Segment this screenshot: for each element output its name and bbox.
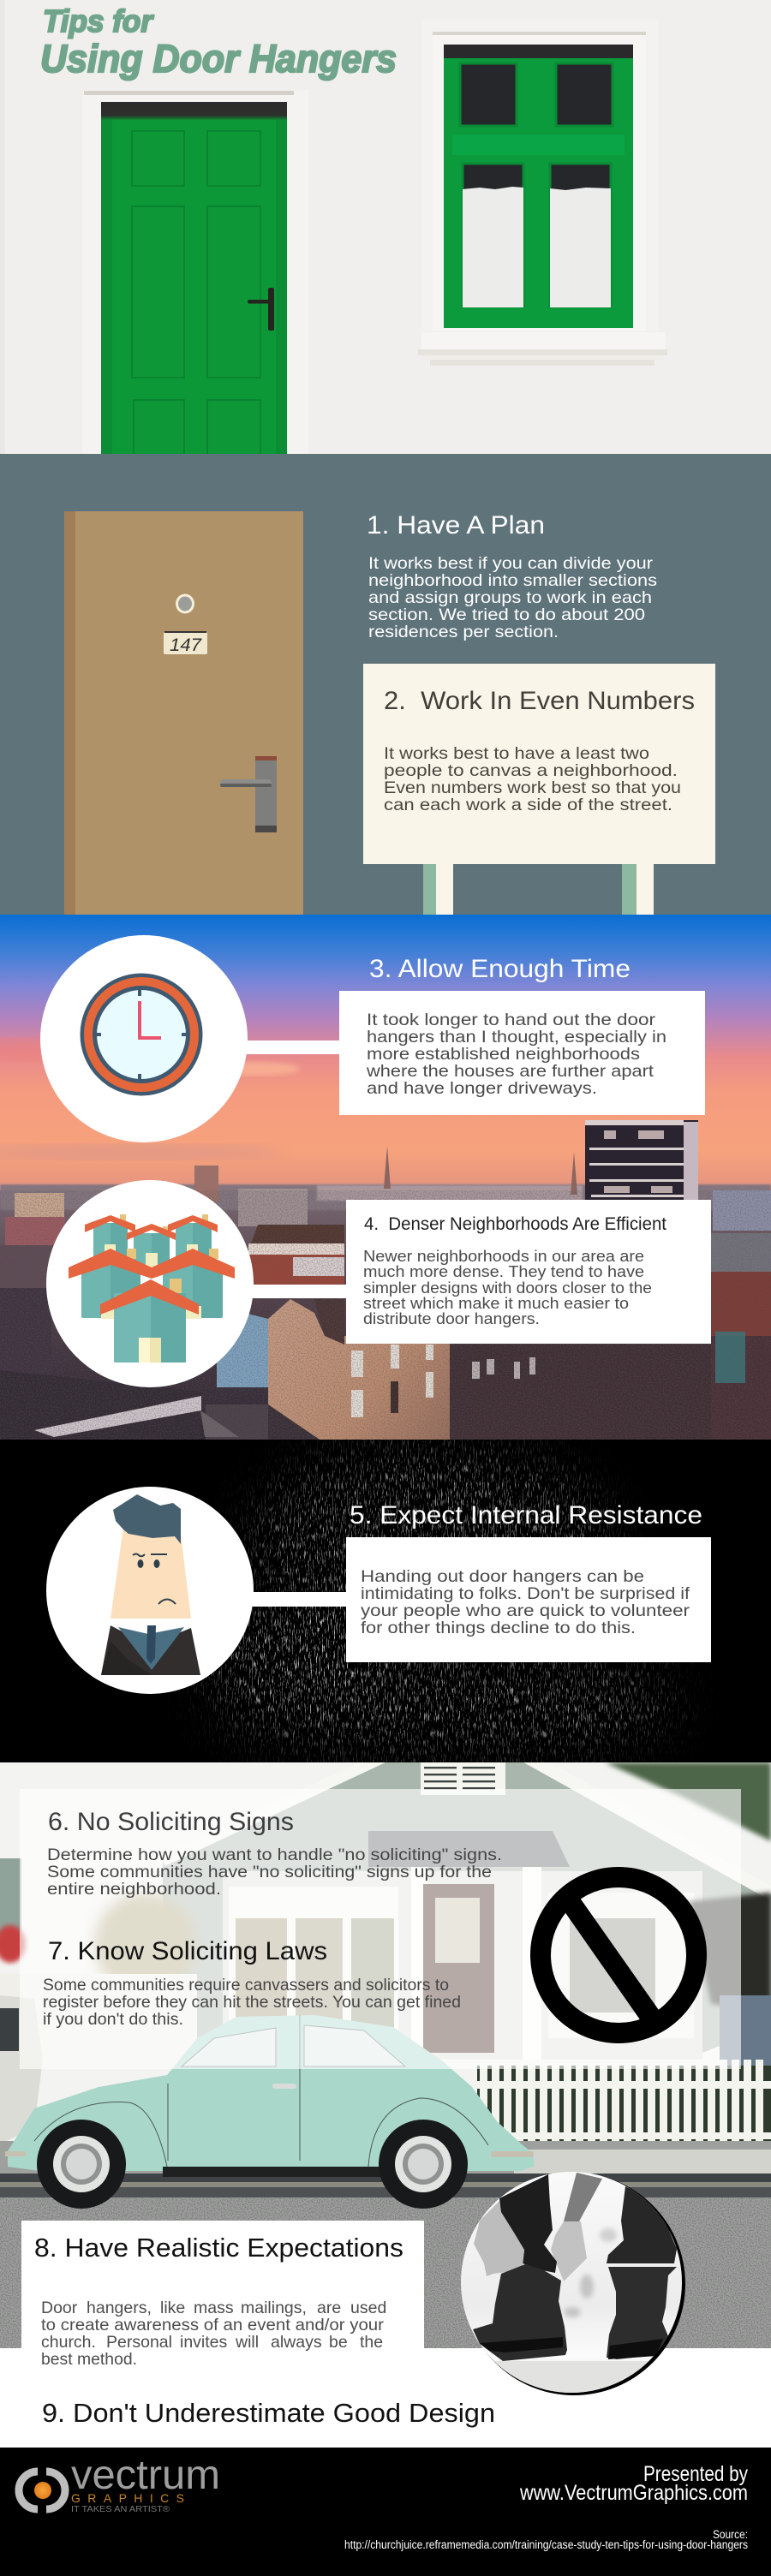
- panel: tip 5 on black grunge: [0, 1440, 771, 1762]
- tip 8 body: be: [329, 2333, 348, 2352]
- panel: tips 3 and 4 over city at sunset: [0, 915, 771, 1440]
- clock circle and connector: [40, 935, 343, 1142]
- illustration: door 147: 147: [170, 635, 202, 655]
- tip 9 heading: 9. Don't Underestimate Good Design: [42, 2398, 495, 2428]
- tip 1 body: It works best if you can divide your: [368, 554, 654, 573]
- presented by: Presented by: [643, 2462, 748, 2486]
- tip 8 body: used: [350, 2299, 386, 2317]
- tip 8 body: [41, 2299, 386, 2369]
- tip 8 heading: 8. Have Realistic Expectations: [34, 2233, 403, 2263]
- tip 4 body: much more dense. They tend to have: [363, 1263, 644, 1280]
- tip 7 text: if you don't do this.: [43, 2010, 183, 2029]
- icon: clock: [81, 973, 202, 1096]
- image: boots in circle: [454, 2172, 694, 2400]
- tip 8 body: to create awareness of an event and/or your: [41, 2316, 385, 2334]
- title: Using Door Hangers: [40, 37, 397, 80]
- tip 5 box: your people who are quick to volunteer: [361, 1601, 690, 1620]
- tip 8 body: Personal: [106, 2333, 172, 2352]
- icon: worried man: [101, 1494, 200, 1675]
- tip 3 box: hangers than I thought, especially in: [367, 1028, 666, 1046]
- logo: GRAPHICS: [71, 2491, 184, 2505]
- tip 4 body: Newer neighborhoods in our area are: [363, 1248, 644, 1265]
- wheels: [37, 2120, 468, 2209]
- panel: tips 8 and 9: [21, 2172, 685, 2427]
- door panels: [132, 131, 260, 455]
- tip 5 box: [346, 1537, 711, 1662]
- logo: IT TAKES AN ARTIST®: [71, 2504, 170, 2514]
- tip 3 heading: 3. Allow Enough Time: [369, 955, 631, 983]
- tip 8 body: church.: [41, 2333, 96, 2352]
- tip 1 body: and assign groups to work in each: [368, 588, 652, 607]
- illustration: door 147: [64, 511, 303, 915]
- tip 4 body: street which make it much easier to: [363, 1295, 629, 1312]
- tip 5 box: Handing out door hangers can be: [361, 1567, 644, 1586]
- logo: [19, 2453, 220, 2514]
- window upper panes: [460, 63, 613, 126]
- tip 4 box: [346, 1200, 711, 1344]
- door frame: [82, 90, 308, 454]
- window lower panes with curtains: [463, 164, 611, 307]
- panel: tips 1 and 2: [0, 454, 771, 915]
- houses circle and connector: [46, 1180, 349, 1387]
- tip 1 body: neighborhood into smaller sections: [368, 571, 657, 590]
- tip 8 body: like: [160, 2299, 185, 2317]
- tip 8 body: hangers,: [87, 2299, 152, 2317]
- tip 8 body: always: [271, 2333, 322, 2352]
- tip 1 heading: 1. Have A Plan: [367, 511, 545, 540]
- tip 6 text: [47, 1808, 502, 1899]
- tip 7 text: Some communities require canvassers and solicitors to: [43, 1976, 449, 1995]
- tip 8 body: will: [235, 2333, 259, 2352]
- window frame: [421, 20, 659, 331]
- panel: footer: [0, 2448, 771, 2576]
- tip 6 text: entire neighborhood.: [47, 1880, 221, 1899]
- city photo: [0, 1039, 771, 1440]
- tip 8 body: best method.: [41, 2350, 137, 2369]
- tip 8 body: mailings,: [241, 2299, 307, 2317]
- panel: tips 6 and 7 over house with car: [0, 1720, 771, 2348]
- tip 3 box: where the houses are further apart: [366, 1062, 654, 1081]
- tip 6 text: Determine how you want to handle "no soliciting" signs.: [47, 1846, 502, 1864]
- icon: houses: [69, 1214, 235, 1363]
- tip 7 text: [43, 1937, 461, 2029]
- panel: hero wall with door and window: [0, 0, 771, 455]
- man circle and connector: [46, 1487, 349, 1694]
- tip 4 body: simpler designs with doors closer to the: [363, 1279, 652, 1297]
- tip 8 body: invites: [180, 2333, 228, 2352]
- tip 8 body: Door: [41, 2299, 78, 2317]
- street and sidewalk: [0, 2141, 771, 2348]
- source: [344, 2528, 748, 2551]
- tip 1 body: section. We tried to do about 200: [368, 605, 645, 624]
- tip 4 body: [363, 1248, 652, 1327]
- tip 2 body: can each work a side of the street.: [384, 796, 672, 814]
- tip 2 body: people to canvas a neighborhood.: [384, 761, 678, 780]
- source: Source:: [713, 2528, 748, 2541]
- tip 5 box: intimidating to folks. Don't be surprised if: [361, 1584, 690, 1603]
- tip 3 box: It took longer to hand out the door: [367, 1011, 656, 1029]
- tip 2 sign: [363, 664, 715, 915]
- tip 2 body: It works best to have a least two: [384, 744, 649, 763]
- tip 7 text: 7. Know Soliciting Laws: [48, 1937, 327, 1965]
- tip 5 box: for other things decline to do this.: [361, 1619, 636, 1637]
- house photo: [0, 1762, 771, 2141]
- icon: no sign: [541, 1877, 696, 2033]
- window transom: [452, 134, 625, 155]
- tip 3 box: [339, 991, 705, 1115]
- window sill: [418, 332, 667, 366]
- tip 3 box: and have longer driveways.: [367, 1079, 597, 1098]
- tip 7 text: register before they can hit the streets. You can get fined: [43, 1993, 461, 2012]
- tip 3 box: more established neighborhoods: [367, 1045, 640, 1064]
- tip 2 heading: 2. Work In Even Numbers: [384, 687, 695, 715]
- picket fence: [477, 2060, 771, 2150]
- car: [5, 2015, 534, 2209]
- tip 8 body: mass: [194, 2299, 234, 2317]
- tip 6 text: 6. No Soliciting Signs: [48, 1808, 294, 1836]
- tip 6 text: Some communities have "no soliciting" signs up for the: [47, 1863, 492, 1881]
- tip 2 body: [384, 744, 681, 814]
- door handle: [248, 288, 274, 331]
- title: Tips for: [43, 3, 154, 39]
- title: [40, 3, 397, 80]
- tip 1 body: residences per section.: [368, 623, 559, 641]
- tip 2 body: Even numbers work best so that you: [384, 778, 681, 797]
- logo: vectrum: [71, 2453, 220, 2498]
- tip 1 body: [368, 554, 657, 641]
- tip 5 heading: 5. Expect Internal Resistance: [350, 1501, 702, 1530]
- tip 8 body: the: [360, 2333, 383, 2352]
- presented by: [519, 2462, 748, 2505]
- tip 8 body: are: [317, 2299, 341, 2317]
- tip 4 body: distribute door hangers.: [363, 1310, 540, 1327]
- office tower: [585, 1120, 698, 1201]
- tip 4 heading: 4. Denser Neighborhoods Are Efficient: [364, 1214, 666, 1234]
- translucent text panel: [20, 1789, 741, 2069]
